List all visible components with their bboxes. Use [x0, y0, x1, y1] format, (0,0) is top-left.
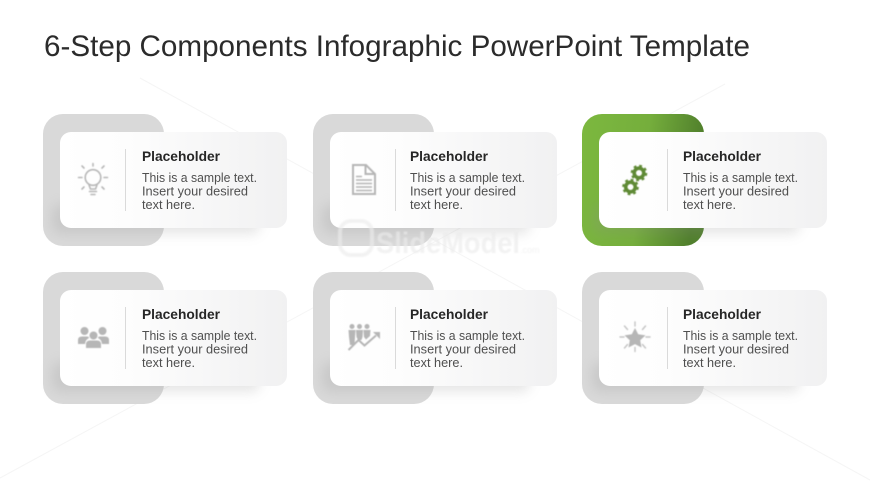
- back square 1: [43, 114, 164, 246]
- icon: gears: [623, 166, 646, 194]
- text block 3: This is a sample text.: [683, 170, 798, 185]
- card 2: [330, 132, 557, 228]
- card 1: [60, 132, 287, 228]
- card 3: [599, 132, 827, 228]
- card 4: [60, 290, 287, 386]
- icon: lightbulb: [78, 164, 108, 194]
- card 6: [599, 290, 827, 386]
- text block 5: Insert your desired: [410, 342, 516, 356]
- text block 1: text here.: [142, 197, 195, 212]
- panel: step 1 lightbulb: [43, 114, 287, 246]
- text block 4: This is a sample text.: [142, 328, 257, 343]
- text block 2: Insert your desired: [410, 184, 516, 198]
- text block 6: This is a sample text.: [683, 328, 798, 343]
- text block 3: text here.: [683, 197, 736, 212]
- icon: team of people: [78, 327, 109, 348]
- text block 1: Insert your desired: [142, 184, 248, 198]
- panel: step 4 team: [43, 272, 287, 404]
- text block 1: This is a sample text.: [142, 170, 257, 185]
- card 5: [330, 290, 557, 386]
- panel: step 2 document: [313, 114, 557, 246]
- icon: people with growth arrow: [348, 324, 380, 350]
- text block 6: text here.: [683, 355, 736, 370]
- watermark: SlideModel: [340, 221, 540, 260]
- back square 6: [582, 272, 704, 404]
- text block 4: text here.: [142, 355, 195, 370]
- icon: document: [353, 165, 375, 194]
- title: 6-Step Components Infographic PowerPoint Template: [44, 30, 750, 63]
- icon: star burst: [620, 322, 650, 352]
- text block 5: text here.: [410, 355, 463, 370]
- text block 2: text here.: [410, 197, 463, 212]
- heading 4: Placeholder: [142, 306, 221, 322]
- watermark: SlideModel: .com: [520, 245, 540, 255]
- text block 2: This is a sample text.: [410, 170, 525, 185]
- panel: step 5 growth: [313, 272, 557, 404]
- back square 5: [313, 272, 434, 404]
- heading 3: Placeholder: [683, 148, 762, 164]
- back square 2: [313, 114, 434, 246]
- panel: step 3 gears highlighted: [582, 114, 827, 246]
- heading 5: Placeholder: [410, 306, 489, 322]
- text block 4: Insert your desired: [142, 342, 248, 356]
- text block 6: Insert your desired: [683, 342, 789, 356]
- panel: step 6 star: [582, 272, 827, 404]
- text block 3: Insert your desired: [683, 184, 789, 198]
- heading 6: Placeholder: [683, 306, 762, 322]
- back square 4: [43, 272, 164, 404]
- text block 5: This is a sample text.: [410, 328, 525, 343]
- back square 3: [582, 114, 704, 246]
- heading 2: Placeholder: [410, 148, 489, 164]
- watermark: SlideModel: SlideModel: [376, 227, 520, 260]
- heading 1: Placeholder: [142, 148, 221, 164]
